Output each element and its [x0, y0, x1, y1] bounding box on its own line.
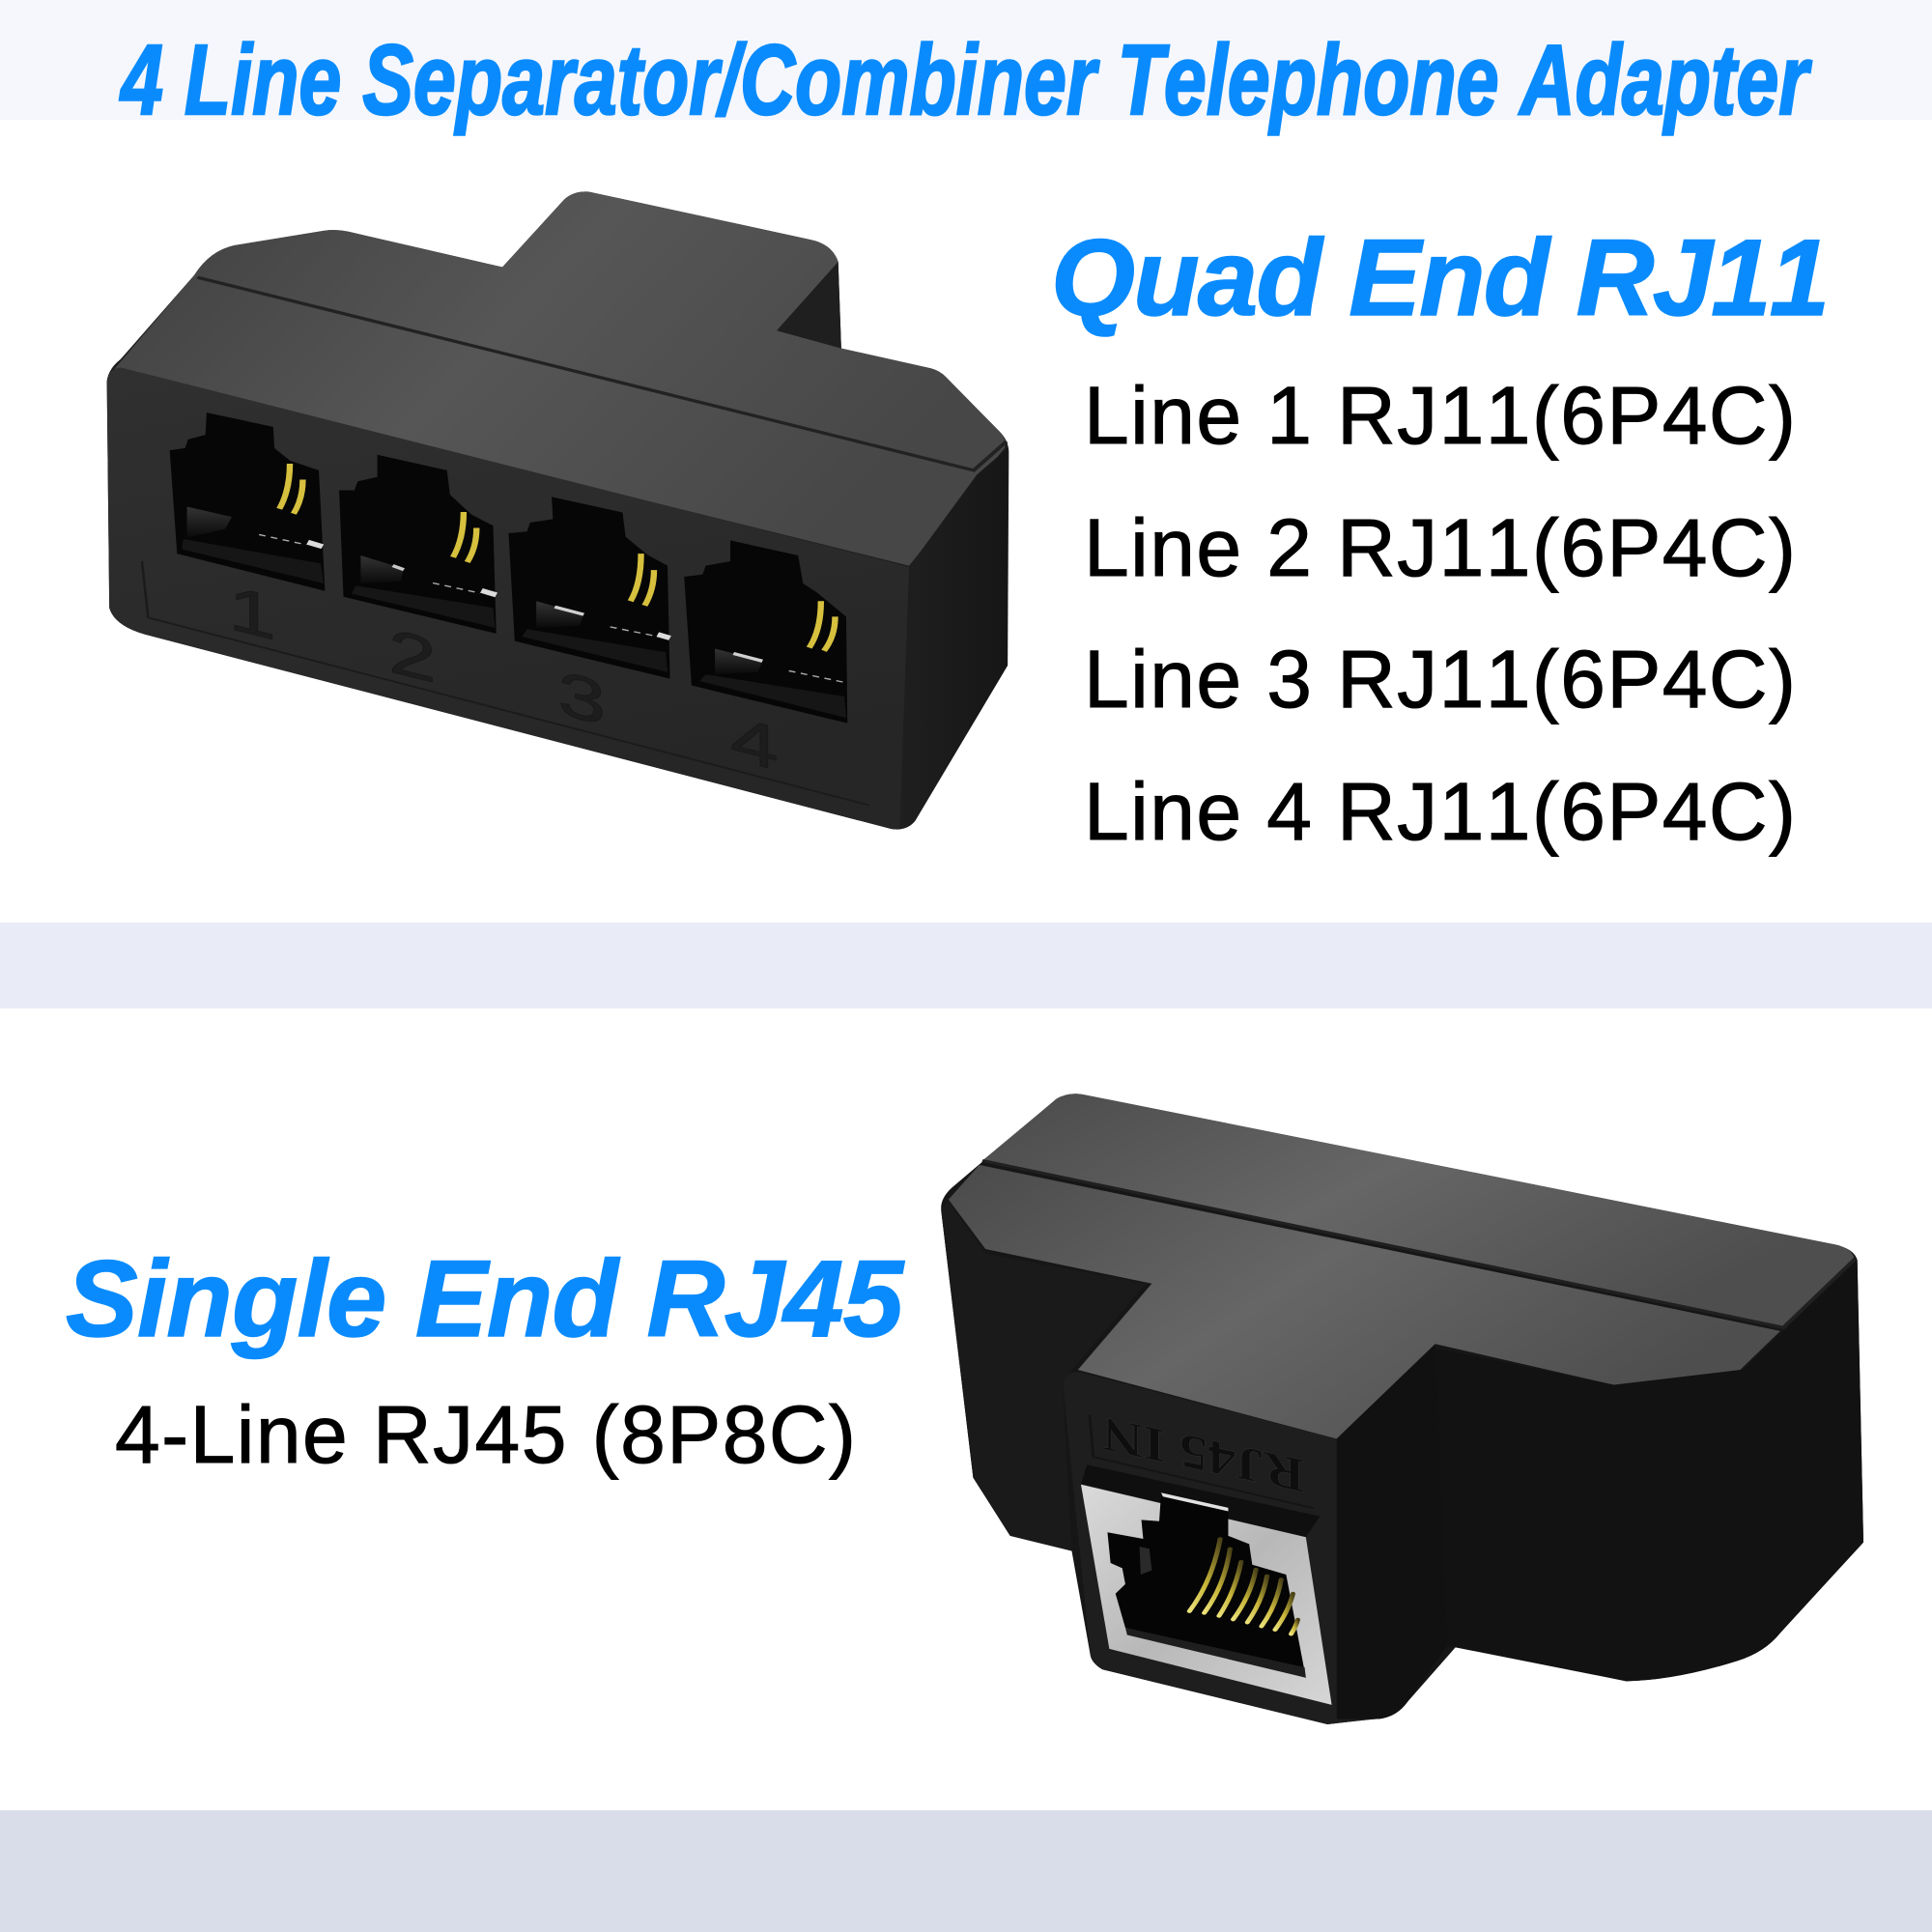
- embossed number 3: 3: [557, 657, 606, 739]
- middle background band: [0, 923, 1932, 1009]
- stem front face: [1063, 1372, 1435, 1724]
- contact 4: [1234, 1570, 1256, 1619]
- bottom inner edge: [1125, 1628, 1306, 1678]
- top face: [114, 191, 1006, 566]
- dashed marks: [611, 627, 657, 637]
- floor shade: [182, 539, 324, 583]
- dashed marks: [433, 582, 480, 593]
- rear stem side: [777, 262, 841, 349]
- gleam tip: [554, 607, 583, 614]
- top background band: [0, 0, 1932, 120]
- embossed number 2: 2: [388, 615, 437, 696]
- contacts: [453, 512, 476, 562]
- floor shade: [699, 674, 846, 718]
- contact 8: [1292, 1619, 1298, 1634]
- gleam: [715, 648, 762, 674]
- silhouette: [941, 1094, 1863, 1724]
- floor shade: [352, 585, 495, 628]
- line 3 label: Line 3 RJ11(6P4C): [1084, 634, 1796, 724]
- metal frame: [1081, 1485, 1332, 1705]
- port 4: [684, 540, 847, 724]
- port opening: [1107, 1494, 1306, 1678]
- contacts: [810, 601, 835, 651]
- gleam: [187, 507, 232, 538]
- line 1 label: Line 1 RJ11(6P4C): [1084, 370, 1796, 461]
- engraved text RJ45 IN: RJ45 IN: [1102, 1406, 1305, 1503]
- shield shadow: [1081, 1464, 1320, 1537]
- label frame line: [142, 561, 869, 806]
- metal port: [1081, 1464, 1332, 1705]
- contacts: [1189, 1539, 1298, 1634]
- contact 6: [1262, 1579, 1281, 1627]
- opening: [339, 455, 497, 634]
- contact 7: [1275, 1594, 1293, 1630]
- latch insert: [1140, 1547, 1151, 1575]
- contact 5: [1247, 1576, 1267, 1623]
- front face: [107, 367, 909, 830]
- right side face: [899, 448, 1008, 828]
- contact 3: [1219, 1562, 1241, 1616]
- lower top face: [949, 1165, 1780, 1438]
- engraved label frame: [1090, 1415, 1314, 1508]
- contacts: [631, 554, 654, 606]
- text: 4-Line RJ45 label: 4-Line RJ45 (8P8C): [115, 1389, 856, 1480]
- dashed marks: [789, 670, 844, 682]
- line 2 label: Line 2 RJ11(6P4C): [1084, 502, 1796, 593]
- heading: Quad End RJ11: Quad End RJ11: [1051, 217, 1830, 338]
- ridge line: [982, 1161, 1856, 1327]
- contacts: [279, 464, 302, 514]
- bottom background band: [0, 1810, 1932, 1932]
- floor shade: [522, 629, 668, 672]
- embossed number 1: 1: [228, 572, 276, 653]
- left wing face: [941, 1202, 1146, 1551]
- embossed number 4: 4: [730, 702, 779, 783]
- port 3: [508, 497, 670, 679]
- line 4 label: Line 4 RJ11(6P4C): [1084, 766, 1796, 857]
- stem right face: [1337, 1344, 1448, 1719]
- ridge line: [197, 277, 1007, 470]
- white tip: [308, 542, 323, 547]
- contact 2: [1205, 1548, 1230, 1613]
- upper top face: [982, 1094, 1854, 1326]
- opening: [508, 497, 670, 679]
- device: single RJ45 adapter: [941, 1094, 1863, 1724]
- gleam: [536, 601, 583, 628]
- silhouette: [107, 191, 1009, 830]
- port 2: [339, 455, 497, 634]
- heading: Single End RJ45: Single End RJ45: [66, 1238, 905, 1359]
- opening: [170, 412, 325, 591]
- port 1: [170, 412, 325, 591]
- gleam tip: [393, 566, 404, 570]
- contact 1: [1189, 1539, 1220, 1611]
- dashed marks: [259, 534, 306, 545]
- shield tab: [1161, 1492, 1228, 1511]
- right wing face: [1435, 1260, 1863, 1681]
- white tip: [658, 635, 670, 638]
- opening: [684, 540, 847, 724]
- white tip: [481, 590, 497, 595]
- gleam tip: [733, 653, 762, 661]
- device: quad RJ11 adapter: [107, 191, 1009, 830]
- text block: RJ11 line list: [1084, 370, 1796, 857]
- gleam: [360, 555, 404, 583]
